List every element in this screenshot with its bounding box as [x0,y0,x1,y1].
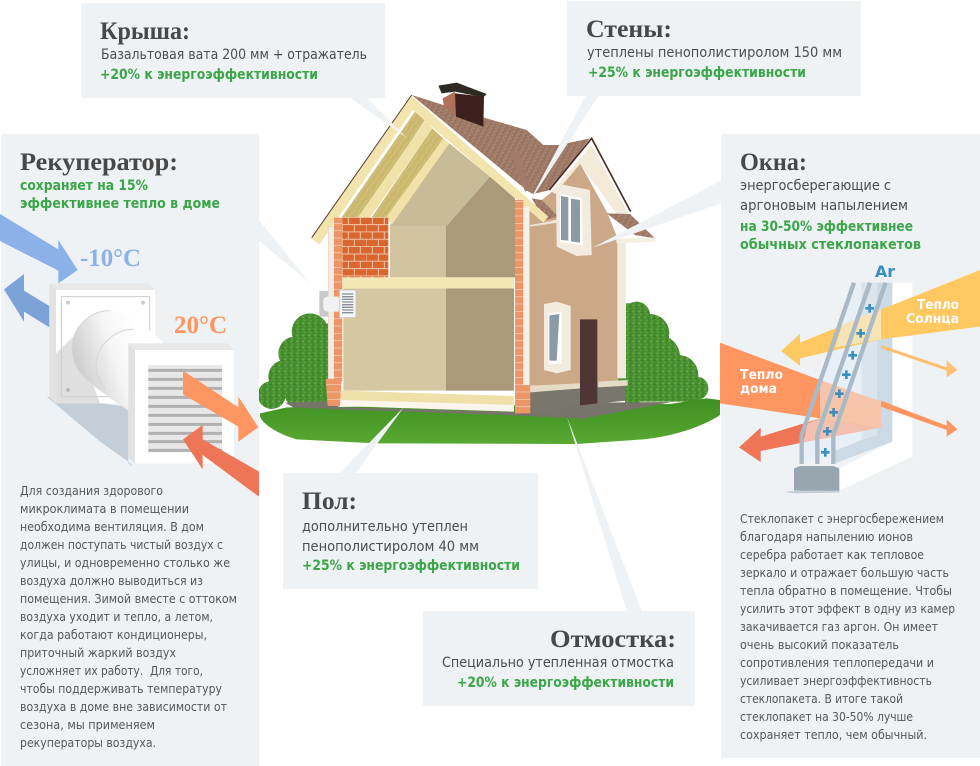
brick wall [342,218,388,277]
heading: walls: Стены: [586,16,672,43]
gutter [616,238,657,243]
heading: blind area: Отмостка: [550,626,676,653]
label: solar heat [906,297,959,327]
recuperator on the wall [319,290,356,318]
panel: roof [81,3,385,98]
panel: blind area [423,611,695,706]
attic left wall [390,227,446,277]
small roof left [532,198,558,220]
glass panes [802,283,886,464]
concrete path [285,401,672,419]
paragraph: windows: зеркало и отражает большую часть [740,566,949,580]
highlight: windows: обычных стеклопакетов [740,237,921,253]
back plate [49,283,155,403]
paragraph: recuperator: необходима вентиляция. В дом [20,520,204,534]
front grille [128,343,234,463]
stucco wall [529,163,618,387]
paragraph: windows: благодаря напылению ионов [740,530,913,544]
paragraph: windows: усиливает энергоэффективность [740,674,932,688]
paragraph: windows: стеклопакета. В итоге такой [740,692,903,706]
pointer: floor [339,407,404,474]
heading: roof: Крыша: [100,18,190,45]
upper window [556,183,592,256]
paragraph: recuperator: помещения. Зимой вместе с оттоком [20,592,237,606]
text: walls: утеплены пенополистиролом 150 мм [587,45,842,61]
paragraph: windows: Стеклопакет с энергосбережением [740,512,944,526]
heading: windows: Окна: [740,149,807,176]
paragraph: recuperator: должен поступать чистый воздух с [20,538,223,552]
pointer: recuperator [258,219,310,283]
rafters [358,120,449,227]
small roof right [607,213,655,238]
left brick column [334,218,342,381]
paragraph: windows: тепла обратно в помещение. Чтобы [740,584,952,598]
door [580,319,597,405]
right brick column [515,200,523,413]
house illustration [258,83,720,444]
gable soffit [552,145,628,214]
panel: walls [567,1,861,96]
paragraph: windows: стеклопакет на 30-50% лучше [740,710,913,724]
highlight: windows [740,219,921,253]
text: blind area: Специально утепленная отмостка [442,655,674,671]
paragraph: windows: очень высокий показатель [740,638,899,652]
arrow: warm air in [183,425,259,497]
paragraph: recuperator: рекуператоры воздуха. [20,736,156,750]
paragraph: recuperator: приточный жаркий воздух [20,646,176,660]
arrow: air out [4,274,49,327]
highlight: floor: +25% к энергоэффективности [302,558,520,574]
arrow: returned heat [739,418,820,462]
heading: recuperator: Рекуператор: [20,149,178,176]
window illustration [720,270,980,493]
paragraph: recuperator [20,484,237,750]
highlight: windows: на 30-50% эффективнее [740,219,913,235]
unit shadow [47,397,133,467]
highlight: roof: +20% к энергоэффективности [100,67,318,83]
paragraph: recuperator: Для создания здорового [20,484,163,498]
text: windows: энергосберегающие с [740,178,891,194]
lower window [544,302,571,373]
rear glass inner strip [862,283,877,440]
rear glass [835,283,892,463]
attic right wall [446,177,515,277]
label: argon: Ar [875,262,895,281]
wall plinth [530,385,626,413]
highlight: recuperator: сохраняет на 15% [20,178,148,194]
paragraph: recuperator: воздуха должно выводиться из [20,574,203,588]
paragraph: windows: закачивается газ аргон. Он имеет [740,620,938,634]
recuperator illustration [0,214,259,497]
paragraph: recuperator: улицы, и одновременно столько же [20,556,230,570]
pointer: roof [349,97,407,138]
pointer: blind area [567,417,642,612]
label: home heat [740,367,783,397]
chimney [438,83,487,127]
gable edge [549,138,631,212]
right bush [617,302,708,403]
heading: floor: Пол: [302,488,357,515]
arrow: cold air in [0,214,78,283]
plinth trim [531,380,628,392]
panel: floor [283,473,538,589]
arrow: warm air out [183,371,258,442]
paragraph: recuperator: когда работают кондиционеры, [20,628,207,642]
paragraph: windows: сохраняет тепло, чем обычный. [740,728,927,742]
left base [326,379,342,406]
text: windows [740,178,908,214]
right base [515,385,530,413]
side drain column [617,242,626,378]
paragraph: windows: сопротивления теплопередачи и [740,656,934,670]
label: home heat: дома [740,381,777,397]
label: solar heat: Солнца [906,311,959,327]
ground floor right wall [446,288,514,391]
left foam strip [328,227,334,379]
panel: windows [720,134,980,758]
text: floor: пенополистиролом 40 мм [302,539,479,555]
paragraph: windows: усилить этот эффект в одну из камер [740,602,955,616]
paragraph: recuperator: воздуха в доме вне зависимости от [20,700,227,714]
label: home heat: Тепло [740,367,783,383]
highlight: recuperator: эффективнее тепло в доме [20,196,220,212]
floor beam [343,278,514,288]
home heat through glass [820,380,881,428]
text: floor [302,519,479,555]
arrow: reflected solar ray [881,345,957,377]
floor foam [341,400,514,412]
roof edge line [312,95,412,238]
white frame [839,283,912,491]
label: outside temperature: -10°C [80,245,141,272]
highlight: blind area: +20% к энергоэффективности [457,675,674,691]
text: windows: аргоновым напылением [740,198,908,214]
roof ridge [511,152,531,192]
paragraph: windows [740,512,955,742]
callout pointers [258,95,722,612]
highlight: recuperator [20,178,220,212]
returned heat through glass [803,418,881,442]
main roof [412,95,590,194]
duct [72,311,163,411]
right foam strip [523,207,529,385]
pointer: walls [527,95,599,206]
front glass [803,283,862,463]
paragraph: windows: серебра работает как тепловое [740,548,924,562]
frame base [794,466,839,491]
lawn [260,398,720,444]
frame shadow [785,488,839,493]
label: solar heat: Тепло [917,297,959,313]
solar heat through glass [835,309,881,347]
pointer: windows [592,180,722,248]
paragraph: recuperator: усложняет их работу. Для того, [20,664,203,678]
roof section board [312,96,548,245]
rear attic wall [390,143,490,227]
panel: recuperator [0,134,259,766]
insulation wool [342,112,443,217]
argon plus signs [821,304,874,457]
paragraph: recuperator: микроклимата в помещении [20,502,189,516]
gutter left [530,218,562,227]
paragraph: recuperator: сезона, мы применяем [20,718,155,732]
arrow: solar heat [781,270,980,366]
paragraph: recuperator: воздуха уходит и тепло, а летом, [20,610,213,624]
left bush [258,313,335,410]
label: inside temperature: 20°C [174,312,227,339]
paragraph: recuperator: чтобы поддерживать температуру [20,682,222,696]
arrow: home heat [720,343,820,418]
arrow: reflected home ray [881,401,957,437]
floor slab [341,391,514,405]
text: floor: дополнительно утеплен [302,519,468,535]
ground floor left wall [343,288,446,391]
highlight: walls: +25% к энергоэффективности [588,65,806,81]
text: roof: Базальтовая вата 200 мм + отражатель [101,47,367,63]
